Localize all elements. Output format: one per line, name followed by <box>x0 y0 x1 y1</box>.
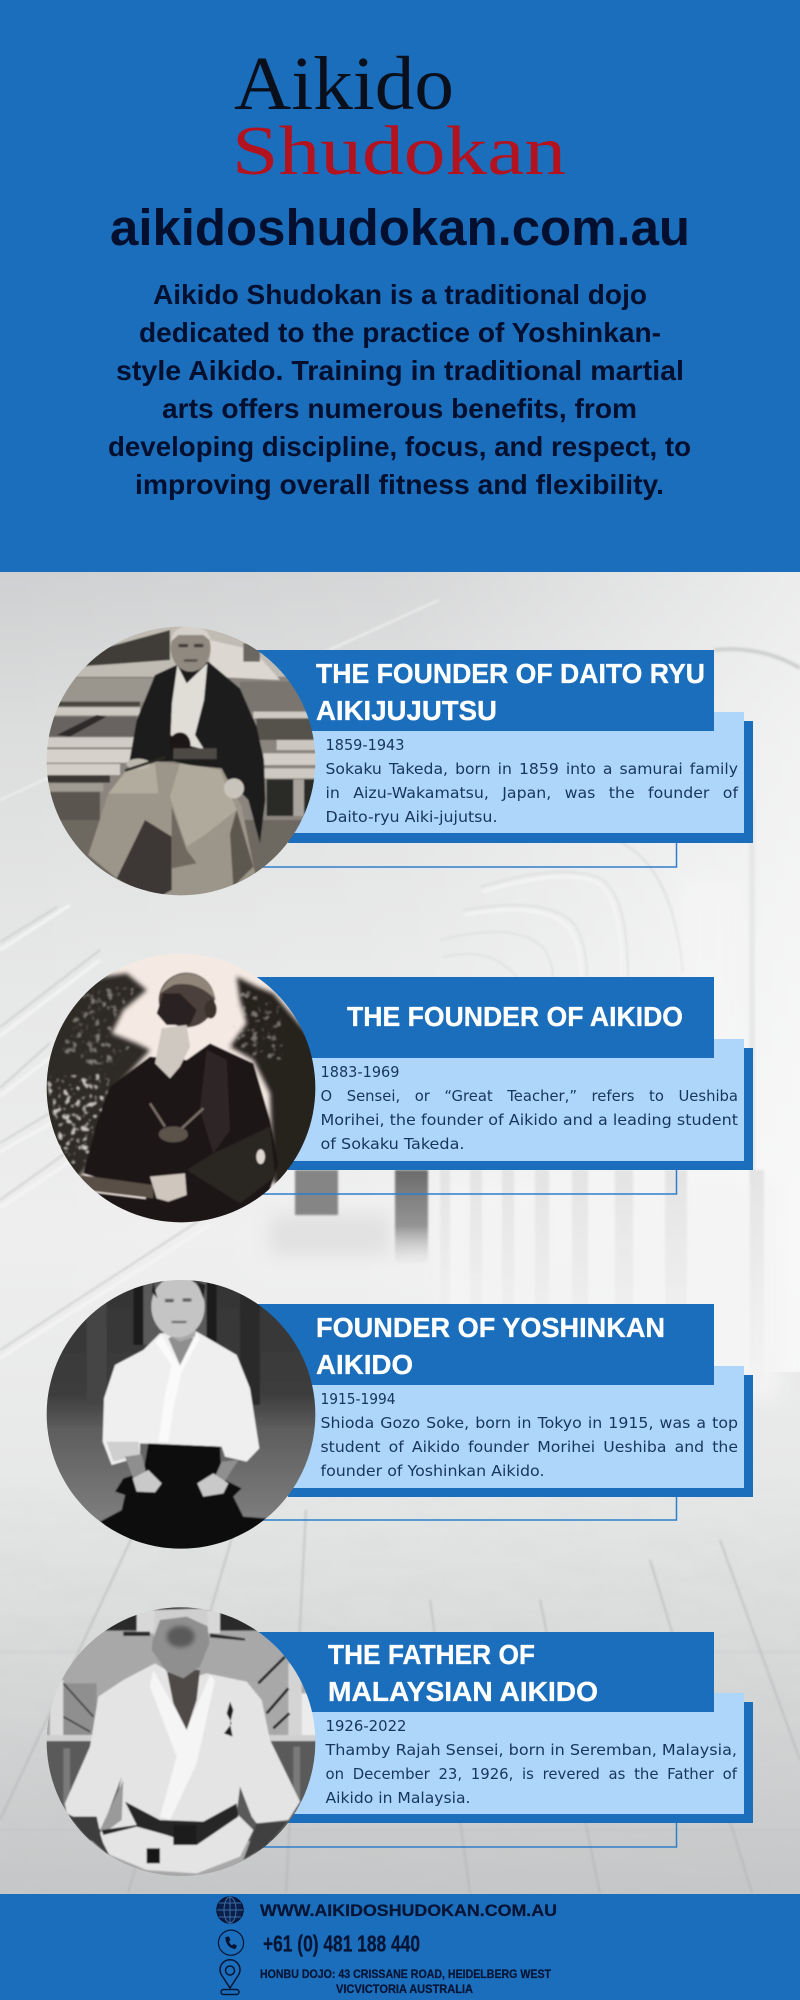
forearms <box>125 1454 147 1478</box>
title bar <box>250 1304 714 1385</box>
jacket <box>129 662 265 843</box>
biography text: 1859-1943 <box>326 736 404 754</box>
belt <box>102 1802 238 1845</box>
portrait: Shioda Gozo <box>40 1275 322 1557</box>
card body <box>288 712 744 833</box>
biography text: Morihei, the founder of Aikido and a leading student <box>320 1111 738 1129</box>
neck and head <box>170 1330 196 1342</box>
portrait: Sokaku Takeda <box>40 620 322 902</box>
biography text <box>326 736 739 826</box>
footer band <box>0 1894 800 2000</box>
intro paragraph: dedicated to the practice of Yoshinkan- <box>139 317 661 348</box>
intro paragraph <box>108 279 691 500</box>
card shadow <box>288 1048 753 1170</box>
logo: Shudokan <box>232 113 566 190</box>
biography text: Shioda Gozo Soke, born in Tokyo in 1915, was a top <box>320 1414 738 1432</box>
panel: Shioda Gozo Soke <box>40 1275 753 1557</box>
biography text: Thamby Rajah Sensei, born in Seremban, Malaysia, <box>324 1741 737 1759</box>
shirt <box>171 663 207 749</box>
gi <box>103 1332 259 1465</box>
title: THE FATHER OF <box>328 1639 535 1670</box>
fists <box>133 1470 162 1492</box>
crest <box>256 1149 265 1164</box>
hakama <box>88 762 255 902</box>
beard <box>155 1025 190 1078</box>
card shadow <box>288 1702 753 1823</box>
phone number: +61 (0) 481 188 440 <box>263 1930 420 1956</box>
card shadow <box>288 1375 753 1497</box>
background: architecture and floor <box>0 572 800 1894</box>
logo: Aikido <box>234 42 454 126</box>
title bar <box>250 650 714 731</box>
biography text: Sokaku Takeda, born in 1859 into a samurai family <box>326 760 738 778</box>
outline frame <box>250 843 676 867</box>
address: HONBU DOJO: 43 CRISSANE ROAD, HEIDELBERG WEST <box>260 1969 551 1981</box>
trees left <box>40 973 150 1183</box>
head <box>152 1611 209 1678</box>
hand <box>150 1173 187 1202</box>
address: VICVICTORIA AUSTRALIA <box>336 1984 473 1996</box>
card body <box>288 1366 744 1488</box>
title: AIKIJUJUTSU <box>316 695 497 726</box>
intro paragraph: Aikido Shudokan is a traditional dojo <box>153 279 647 310</box>
forearms <box>70 1817 110 1857</box>
title <box>316 658 705 726</box>
title: THE FOUNDER OF AIKIDO <box>347 1001 683 1032</box>
icon: globe <box>217 1897 243 1923</box>
biography text: Daito-ryu Aiki-jujutsu. <box>326 808 498 826</box>
title <box>316 1312 665 1380</box>
biography text: on December 23, 1926, is revered as the Father of <box>326 1765 738 1783</box>
biography text: 1926-2022 <box>326 1717 406 1735</box>
gi <box>65 1663 300 1873</box>
outline frame <box>250 1823 676 1847</box>
title bar <box>250 1632 714 1712</box>
header band <box>0 0 800 572</box>
panel: O Sensei <box>40 950 753 1232</box>
biography text: of Sokaku Takeda. <box>320 1135 464 1153</box>
title: MALAYSIAN AIKIDO <box>328 1676 598 1707</box>
outline frame <box>250 1497 676 1520</box>
biography text: 1915-1994 <box>320 1390 396 1408</box>
card body <box>288 1693 744 1814</box>
intro paragraph: improving overall fitness and flexibility. <box>135 469 664 500</box>
crest embroidery <box>224 1702 233 1737</box>
biography text <box>324 1717 738 1807</box>
trees right <box>230 977 322 1183</box>
panel: Sokaku Takeda <box>40 620 753 902</box>
robe <box>83 1043 278 1232</box>
title bar <box>250 977 714 1058</box>
biography text: O Sensei, or “Great Teacher,” refers to Ueshiba <box>320 1087 738 1105</box>
biography text <box>320 1390 738 1480</box>
portrait: Thamby Rajah <box>40 1600 322 1882</box>
biography text <box>320 1063 738 1153</box>
biography text: in Aizu-Wakamatsu, Japan, was the founder of <box>326 784 739 802</box>
biography text: founder of Yoshinkan Aikido. <box>320 1462 544 1480</box>
card shadow <box>288 721 753 843</box>
icon: phone <box>218 1930 244 1955</box>
logo <box>232 42 566 190</box>
website link: WWW.AIKIDOSHUDOKAN.COM.AU <box>260 1901 557 1920</box>
card body <box>288 1039 744 1161</box>
sword <box>80 1175 153 1198</box>
necklace tassel <box>159 1126 188 1142</box>
biography text: student of Aikido founder Morihei Ueshiba and the <box>320 1438 738 1456</box>
title <box>328 1639 598 1707</box>
icon: map pin <box>220 1960 240 1994</box>
title: FOUNDER OF YOSHINKAN <box>316 1312 665 1343</box>
outline frame <box>250 1170 676 1194</box>
head <box>170 634 212 673</box>
portrait: Ueshiba Morihei <box>40 950 322 1232</box>
website heading: aikidoshudokan.com.au <box>110 199 690 256</box>
panel: Thamby Rajah Sensei <box>40 1600 753 1882</box>
intro paragraph: developing discipline, focus, and respect, to <box>108 431 691 462</box>
intro paragraph: style Aikido. Training in traditional martial <box>116 355 684 386</box>
title: AIKIDO <box>316 1349 413 1380</box>
biography text: Aikido in Malaysia. <box>326 1789 470 1807</box>
intro paragraph: arts offers numerous benefits, from <box>162 393 637 424</box>
biography text: 1883-1969 <box>320 1063 400 1081</box>
head <box>159 973 215 1027</box>
title: THE FOUNDER OF DAITO RYU <box>316 658 705 689</box>
address <box>260 1969 551 1996</box>
hands <box>126 759 150 769</box>
hakama <box>100 1443 267 1557</box>
